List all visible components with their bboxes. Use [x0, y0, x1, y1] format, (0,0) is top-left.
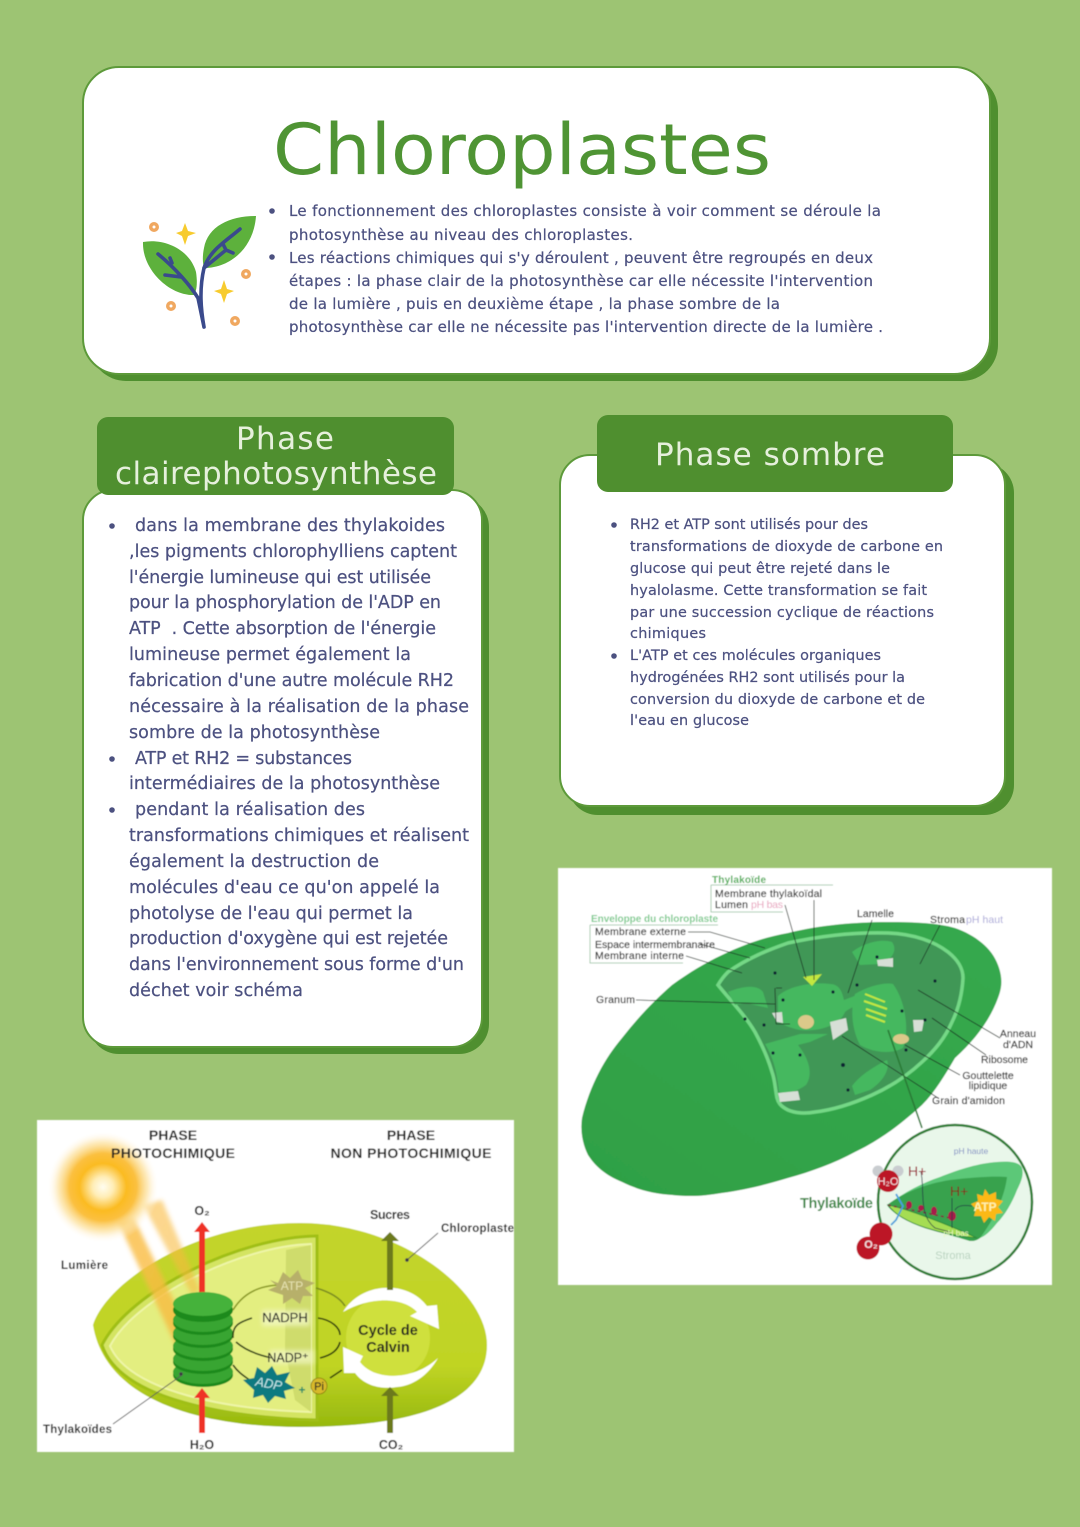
- intro bullet text: Les réactions chimiques qui s'y déroulent , peuvent être regroupés en deux: [289, 249, 873, 267]
- thylakoid stack: [173, 1292, 233, 1387]
- arrows: sugars and carbon dioxide: [381, 1232, 399, 1433]
- chart: photosynthesis phases diagram: [37, 1120, 514, 1452]
- grana and lamellae: [728, 941, 937, 1102]
- inner compartment: [102, 1236, 317, 1420]
- anatomy labels: Ribosome: [981, 1054, 1028, 1066]
- phase sombre text: glucose qui peut être rejeté dans le: [630, 561, 890, 577]
- phase claire text: dans l'environnement sous forme d'un: [129, 955, 464, 975]
- phase claire text: nécessaire à la réalisation de la phase: [129, 697, 469, 717]
- energy molecules and cycle arrows: ATP: [281, 1279, 303, 1293]
- energy molecules and cycle arrows: NADP⁺: [267, 1351, 309, 1365]
- anatomy labels: Enveloppe du chloroplaste: [591, 914, 718, 925]
- phase claire text: fabrication d'une autre molécule RH2: [129, 671, 454, 691]
- phase sombre text: par une succession cyclique de réactions: [630, 605, 934, 621]
- phase claire text: déchet voir schéma: [129, 981, 303, 1001]
- anatomy labels: Membrane thylakoïdal: [715, 888, 822, 900]
- intro bullet text: photosynthèse au niveau des chloroplastes.: [289, 226, 633, 244]
- phase claire text: l'énergie lumineuse qui est utilisée: [129, 568, 431, 588]
- heading: phase sombre: Phase sombre: [655, 437, 885, 473]
- heading: phase claire: clairephotosynthèse: [115, 456, 437, 492]
- phase claire text: ATP et RH2 = substances: [135, 749, 352, 769]
- anatomy labels: lipidique: [969, 1080, 1007, 1092]
- phase sombre text: l'eau en glucose: [630, 713, 749, 729]
- heading: phase claire: Phase: [236, 421, 334, 457]
- energy molecules and cycle arrows: NADPH: [262, 1310, 308, 1325]
- phase claire text: ,les pigments chlorophylliens captent: [129, 542, 457, 562]
- intro bullet text: étapes : la phase clair de la photosynthèse car elle nécessite l'intervention: [289, 272, 873, 290]
- anatomy labels: Thylakoïde: [712, 875, 766, 886]
- phase claire text: intermédiaires de la photosynthèse: [129, 774, 440, 794]
- phase claire text: transformations chimiques et réalisent: [129, 826, 469, 846]
- panel: phase sombre: [560, 415, 1014, 815]
- energy molecules and cycle arrows: +: [298, 1383, 306, 1397]
- phase claire text: dans la membrane des thylakoides: [135, 516, 445, 536]
- anatomy labels: Gouttelette: [962, 1070, 1014, 1082]
- inset: thylakoid detail: pH haute: [954, 1146, 989, 1156]
- phase sombre text: transformations de dioxyde de carbone en: [630, 539, 943, 555]
- anatomy labels: Espace intermembranaire: [595, 939, 715, 951]
- energy molecules and cycle arrows: ADP: [253, 1374, 284, 1393]
- photosynthesis labels: PHASE: [387, 1127, 435, 1143]
- heading: phase sombre: [597, 415, 953, 492]
- photosynthesis labels: CO₂: [379, 1438, 403, 1452]
- phase claire text: production d'oxygène qui est rejetée: [129, 929, 448, 949]
- chloroplast body: [581, 922, 1001, 1196]
- anatomy labels: Lumen: [715, 899, 748, 911]
- phase sombre text: hyalolasme. Cette transformation se fait: [630, 583, 927, 599]
- intro bullet text: de la lumière , puis en deuxième étape , la phase sombre de la: [289, 295, 780, 313]
- chart: chloroplast anatomy diagram: [558, 868, 1052, 1285]
- phase sombre text: RH2 et ATP sont utilisés pour des: [630, 517, 868, 533]
- anatomy labels: Anneau: [1000, 1028, 1036, 1040]
- title: Chloroplastes: [273, 109, 771, 191]
- phase claire text: pendant la réalisation des: [135, 800, 365, 820]
- photosynthesis labels: PHOTOCHIMIQUE: [111, 1145, 235, 1161]
- Calvin cycle: Cycle de: [358, 1323, 418, 1339]
- photosynthesis labels: PHASE: [149, 1127, 197, 1143]
- Calvin cycle: [343, 1288, 439, 1388]
- inset: thylakoid detail: ATP: [973, 1200, 997, 1214]
- anatomy labels: Stroma: [930, 914, 965, 926]
- intro bullet text: Le fonctionnement des chloroplastes consiste à voir comment se déroule la: [289, 202, 881, 220]
- phase claire text: ATP . Cette absorption de l'énergie: [129, 619, 436, 639]
- icon: sun and light beams: [47, 1131, 200, 1350]
- phase claire text: [109, 516, 469, 1001]
- phase claire text: pour la phosphorylation de l'ADP en: [129, 593, 441, 613]
- Calvin cycle: Calvin: [366, 1340, 410, 1356]
- anatomy labels: Membrane externe: [595, 926, 686, 938]
- phase sombre text: [611, 517, 943, 729]
- phase sombre text: hydrogénées RH2 sont utilisés pour la: [630, 670, 905, 686]
- panel: phase claire: [83, 417, 489, 1054]
- anatomy labels: Grain d'amidon: [932, 1095, 1005, 1107]
- stroma: [718, 933, 963, 1113]
- arrows: oxygen and water: [194, 1222, 210, 1433]
- phase claire text: molécules d'eau ce qu'on appelé la: [129, 878, 440, 898]
- phase claire text: lumineuse permet également la: [129, 645, 411, 665]
- intro bullet text: photosynthèse car elle ne nécessite pas l'intervention directe de la lumière .: [289, 318, 883, 336]
- phase sombre text: conversion du dioxyde de carbone et de: [630, 692, 925, 708]
- leader lines: [113, 1233, 438, 1424]
- anatomy labels: pH bas: [751, 899, 783, 911]
- anatomy labels: Thylakoïde: [800, 1196, 873, 1212]
- energy molecules and cycle arrows: Pi: [314, 1381, 324, 1393]
- leader lines: [590, 885, 1000, 1128]
- energy molecules and cycle arrows: [233, 1270, 345, 1403]
- phase sombre text: L'ATP et ces molécules organiques: [630, 648, 881, 664]
- intro bullet text: [269, 202, 883, 336]
- anatomy labels: [591, 875, 1036, 1212]
- anatomy labels: d'ADN: [1003, 1039, 1033, 1051]
- photosynthesis labels: Sucres: [370, 1208, 410, 1222]
- phase claire text: sombre de la photosynthèse: [129, 723, 380, 743]
- inset: thylakoid detail: [856, 1125, 1032, 1279]
- phase claire text: également la destruction de: [129, 852, 379, 872]
- chloroplast dome: [93, 1223, 487, 1427]
- icon: plant with sparkles: [143, 216, 256, 327]
- anatomy labels: Membrane interne: [595, 950, 684, 962]
- photosynthesis labels: [43, 1127, 514, 1452]
- inset: thylakoid detail: H+: [950, 1183, 968, 1199]
- inset: thylakoid detail: H+: [908, 1163, 926, 1179]
- inset: thylakoid detail: H₂O: [878, 1176, 899, 1188]
- anatomy labels: Lamelle: [857, 908, 894, 920]
- photosynthesis labels: Thylakoïdes: [43, 1424, 112, 1436]
- photosynthesis labels: O₂: [194, 1204, 210, 1218]
- photosynthesis labels: Chloroplaste: [441, 1223, 514, 1235]
- inset: thylakoid detail: Stroma: [935, 1250, 972, 1262]
- photosynthesis labels: NON PHOTOCHIMIQUE: [330, 1145, 492, 1161]
- photosynthesis labels: Lumière: [61, 1260, 108, 1272]
- panel: introduction: [83, 67, 998, 381]
- phase claire text: photolyse de l'eau qui permet la: [129, 904, 413, 924]
- anatomy labels: pH haut: [966, 914, 1003, 926]
- heading: phase claire: [97, 417, 454, 495]
- anatomy labels: Granum: [596, 994, 635, 1006]
- inset: thylakoid detail: O₂: [864, 1239, 878, 1251]
- inset: thylakoid detail: pH bas: [943, 1229, 969, 1238]
- phase sombre text: chimiques: [630, 626, 706, 642]
- photosynthesis labels: H₂O: [190, 1438, 214, 1452]
